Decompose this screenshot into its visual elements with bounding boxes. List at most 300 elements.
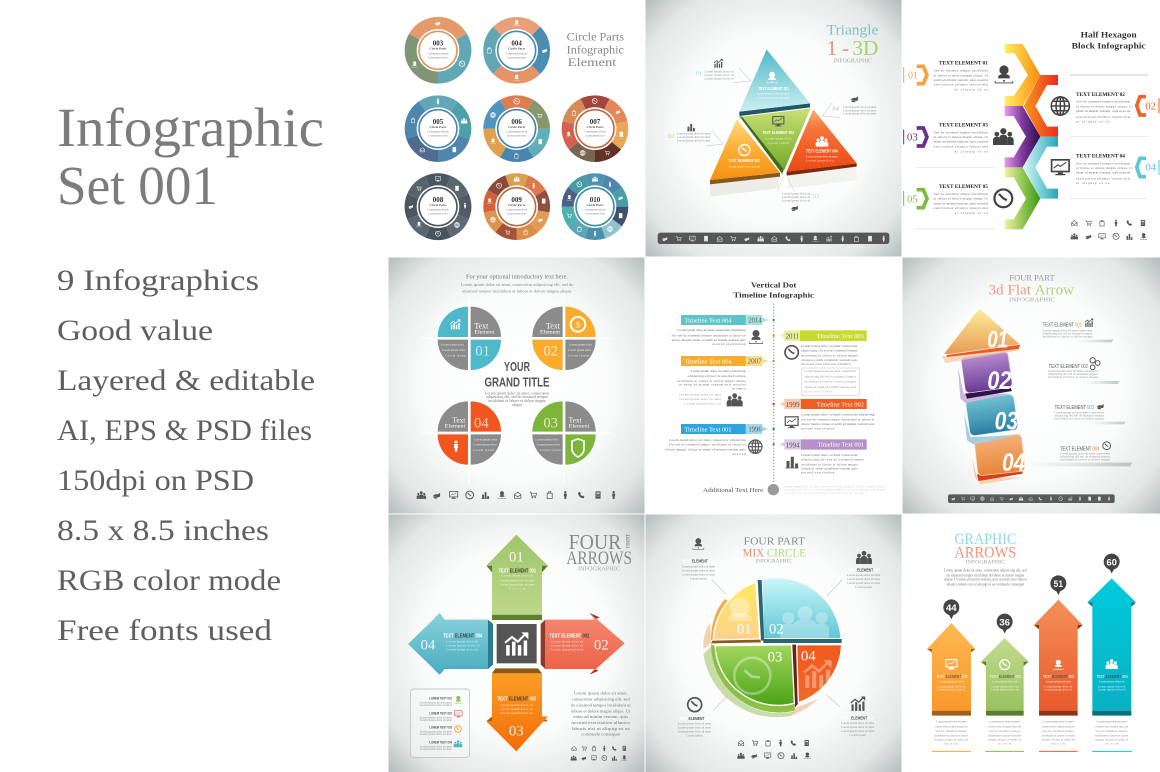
- heading: mix circle: [743, 537, 806, 565]
- block 03: 03: [907, 133, 918, 144]
- ring 010: Circle Parts: [586, 203, 604, 207]
- column captions: Lorem ipsum dolor sit amet: [1096, 720, 1127, 724]
- ring 009: Lorem ipsum dolor: [507, 212, 528, 216]
- timeline entry 1999: nostrud exercitation: [801, 426, 835, 430]
- block 04: 04: [1145, 163, 1156, 174]
- ring 003: [401, 13, 475, 88]
- triangle: red right: Lorem ipsum dolor sit amet: [806, 154, 838, 158]
- label 003: adipisicing elit sed do eiusmod tempor: [1054, 413, 1105, 417]
- arrow up: green: Lorem: [509, 586, 526, 590]
- heading: timeline: Vertical Dot: [751, 281, 797, 290]
- timeline entry 1994: adipisicing elit sed do eiusmod tempor: [801, 458, 865, 462]
- callout 003: Lorem ipsum dolor sit amet: [678, 726, 711, 730]
- heading: 3d flat arrow: 3d Flat Arrow: [989, 282, 1074, 298]
- column captions: sed do eiusmod tempor: [935, 729, 968, 733]
- circle 02: [532, 307, 596, 370]
- label 002: TEXT ELEMENT 002: [1049, 364, 1088, 370]
- circle 03: Lorem ipsum dolor: [537, 443, 561, 447]
- arrow right: red: Lorem ipsum dolor sit: [551, 644, 583, 648]
- icon toolbar: [658, 233, 889, 244]
- ring 008: Lorem ipsum dolor: [428, 212, 449, 216]
- heading: 3d flat arrow: [989, 273, 1074, 303]
- column captions: Lorem ipsum dolor sit amet: [936, 720, 967, 724]
- label 003: [1054, 404, 1105, 420]
- tile gutters: [388, 0, 1160, 772]
- panel: four part mix circle: [645, 514, 902, 772]
- arrow left: teal: Lorem ipsum dolor sit: [446, 644, 480, 648]
- timeline entry 1994: aliqua ut enim ad minim veniam quis: [801, 467, 858, 471]
- pie shadows: [703, 599, 818, 717]
- ring 007: Lorem ipsum dolor: [585, 134, 606, 138]
- ring 008: [402, 171, 474, 242]
- timeline entry 1999: elit sed do eiusmod tempor incididunt ut labore et: [801, 417, 874, 421]
- ring 009: Lorem ipsum dolor sit: [506, 208, 527, 212]
- timeline entry 1994: Timeline Text 001: [817, 443, 864, 449]
- arrow segment 04: [972, 434, 1026, 484]
- circle 01: Lorem ipsum dolor: [441, 343, 465, 347]
- heading: four arrows: INFOGRAPHIC: [578, 567, 620, 573]
- arrow: 36 green: Lorem ipsum dolor sit: [991, 684, 1019, 688]
- arrow: 51 red: Lorem ipsum dolor sit: [1044, 688, 1072, 692]
- column captions: minim: [1052, 742, 1065, 746]
- triangle reflections: [710, 168, 857, 197]
- callout 004: Lorem ipsum: [849, 733, 866, 737]
- timeline entry 1996: nostrud: [732, 452, 746, 456]
- grand title: YOUR: [504, 360, 530, 374]
- heading: 3d flat arrow: INFOGRAPHIC: [1009, 297, 1055, 303]
- column captions: consectetur adipisicing elit: [1095, 724, 1128, 728]
- annotation 01: Lorem ipsum dolor sit: [704, 73, 734, 77]
- grand title body: adipisicing elit, sed do eiusmod tempor: [486, 394, 549, 400]
- triangle: green inverted: TEXT ELEMENT 003: [762, 130, 794, 136]
- ring 003: Lorem ipsum dolor sit: [427, 51, 449, 55]
- legend box: Lorem ipsum dolor sit amet: [420, 703, 452, 707]
- right paragraph: labore et dolore magna aliqua. Ut: [571, 708, 631, 713]
- column captions: Lorem ipsum dolor sit amet: [1043, 720, 1074, 724]
- arrow up: green: Lorem ipsum dolor sit: [501, 574, 533, 578]
- annotation 01: 01: [696, 70, 702, 77]
- heading: half hexagon: [1072, 31, 1146, 50]
- block 01: Sed do eiusmod tempor incididunt: [934, 69, 988, 73]
- callout 002: Lorem ipsum dolor sit amet: [847, 581, 880, 585]
- center chart square: [495, 622, 538, 665]
- feature list: 8.5 x 8.5 inches: [57, 514, 269, 547]
- icon grid: [1071, 220, 1147, 240]
- circle 04: 04: [474, 416, 489, 432]
- intro body: Lorem ipsum dolor sit amet, consectetur adipisicing elit, sed: [944, 567, 1027, 573]
- annotation 04: [822, 96, 876, 118]
- arrow right: red: 02: [594, 638, 609, 654]
- arrow: 36 green: [981, 614, 1029, 716]
- additional text footer: nostrud exercitation ullamco laboris nisi ut aliquip: [784, 492, 865, 495]
- ring 009: Circle Parts: [508, 203, 526, 207]
- callout 003: Lorem ipsum: [686, 734, 703, 738]
- circle 01: 01: [475, 344, 490, 360]
- triangle: green inverted: Lorem ipsum: [768, 141, 790, 145]
- annotation 04: Lorem ipsum dolor sit amet: [843, 105, 876, 109]
- panel: title and feature list: [57, 97, 324, 647]
- arrow: 60 cyan: Lorem ipsum dolor sit: [1098, 684, 1126, 688]
- label 002: adipisicing elit sed do eiusmod tempor: [1048, 372, 1099, 376]
- feature list: AI, EPS & PSD files: [57, 414, 312, 447]
- annotation 02: Lorem ipsum dolor sit amet: [677, 138, 710, 142]
- grand title body: incididunt ut labore et dolore magna: [488, 398, 546, 403]
- column captions: incididunt ut labore et dolore: [1042, 734, 1076, 738]
- circle 01: [438, 307, 501, 370]
- ring 007: 007: [590, 118, 601, 126]
- arrow segment 04: 04: [1002, 450, 1026, 477]
- ring 005: Lorem ipsum dolor: [428, 134, 449, 138]
- block 05: TEXT ELEMENT 05: [939, 184, 988, 190]
- timeline entry 2014: elit sed do eiusmod tempor incididunt ut labore et: [672, 333, 746, 337]
- right paragraph: laboris nisi ut aliquip ex ea: [572, 726, 630, 731]
- block 04: Sed do eiusmod tempor incididunt: [1076, 161, 1130, 165]
- panel: your grand title infographic: [388, 257, 645, 514]
- arrow right: red: Lorem ipsum dolor sit: [551, 648, 583, 652]
- circle 03: Lorem ipsum: [540, 448, 561, 452]
- callout 001: Lorem ipsum dolor sit amet: [682, 568, 715, 572]
- grand title: [484, 360, 549, 390]
- arrow left: teal: Lorem ipsum dolor sit: [446, 648, 478, 652]
- icon row: [417, 491, 615, 499]
- block 05: 05: [907, 194, 918, 205]
- timeline entry 1996: [666, 424, 775, 456]
- callout 003: TEXT ELEMENT 003: [679, 716, 711, 721]
- ring 006: 006: [511, 118, 522, 126]
- ring 008: Circle Parts: [429, 203, 447, 207]
- timeline entry 1994: incididunt ut labore et dolore magna: [801, 462, 858, 466]
- callout 001: Lorem ipsum dolor sit amet: [682, 564, 715, 568]
- ring 004: Circle Parts: [508, 47, 526, 51]
- column captions: minim: [945, 742, 958, 746]
- column captions: magna aliqua ut enim ad: [935, 738, 968, 742]
- right paragraph: consectetur adipisicing elit, sed: [572, 696, 631, 702]
- circle 02: 02: [543, 344, 558, 360]
- right paragraph: nostrud exercitation ullamco: [571, 720, 630, 725]
- arrow up: green: TEXT ELEMENT 001: [499, 568, 536, 574]
- heading: graphic arrows: INFOGRAPHIC: [966, 559, 1005, 565]
- right paragraph: Lorem ipsum dolor sit amet,: [574, 690, 628, 696]
- pie slice 02 blue: 02: [769, 621, 784, 637]
- chevron: red: [1024, 75, 1058, 137]
- column captions: sed do eiusmod tempor: [989, 729, 1022, 733]
- triangle: green inverted: Lorem ipsum dolor: [765, 136, 793, 140]
- intro text: eiusmod tempor incididunt ut labore et dolore magna aliqua.: [462, 289, 572, 294]
- arrow: 44 orange: TEXT ELEMENT 001: [936, 674, 968, 680]
- block 01: ut labore et dolore magna aliqua. Ut: [934, 73, 988, 77]
- column captions: [935, 720, 1129, 746]
- heading: four arrows: ARROWS: [566, 548, 632, 569]
- timeline entry 2014: dolore magna aliqua ut enim ad minim veniam quis: [672, 338, 746, 342]
- annotation 02: [668, 124, 723, 146]
- triangle: orange left: Lorem ipsum dolor sit amet: [728, 164, 760, 168]
- arrow: 60 cyan: Lorem ipsum dolor sit: [1099, 680, 1124, 684]
- label 002: [1048, 358, 1100, 379]
- title: Set 001: [57, 155, 218, 216]
- ring 007: Lorem ipsum dolor sit: [584, 130, 606, 134]
- callout 002: Lorem ipsum dolor sit amet: [847, 573, 880, 577]
- block 05: Sed do eiusmod tempor incididunt: [934, 192, 988, 196]
- callout 004: Lorem ipsum dolor sit amet: [841, 729, 874, 733]
- callout 001: Lorem ipsum dolor sit amet: [682, 572, 715, 576]
- intro body: ullamco laboris nisi ut aliquip ex ea commodo consequat: [947, 581, 1025, 586]
- pie slice 03 green: [715, 645, 794, 705]
- column captions: incididunt ut labore et dolore: [935, 734, 969, 738]
- ring 006: Lorem ipsum dolor sit: [506, 130, 527, 134]
- note box: [802, 368, 859, 395]
- legend box: Lorem ipsum dolor sit amet: [420, 747, 452, 751]
- callout 004: [826, 695, 874, 737]
- timeline entry 1999: Lorem ipsum dolor sit amet consectetur adipisicing: [801, 413, 875, 417]
- arrow: 44 orange: Lorem ipsum dolor sit: [937, 684, 965, 688]
- grand title body: aliqua: [512, 402, 522, 407]
- ring 007: [557, 90, 633, 167]
- timeline entry 2014: nostrud exercitation: [712, 342, 746, 346]
- block 04: TEXT ELEMENT 04: [1076, 154, 1125, 160]
- callout 004: TEXT ELEMENT 004: [842, 715, 874, 720]
- arrow left: teal: Lorem ipsum dolor sit: [446, 640, 478, 644]
- heading: triangle 1-3D: [827, 22, 878, 64]
- arrow right: red: [541, 613, 625, 675]
- timeline entry 2007: ullamco: [732, 386, 746, 390]
- icon grid: [571, 746, 627, 761]
- ring 004: Lorem ipsum dolor: [507, 55, 528, 59]
- legend box: Lorem ipsum dolor sit amet: [420, 729, 452, 733]
- block 02: TEXT ELEMENT 02: [1076, 92, 1125, 98]
- circle 03: Lorem ipsum dolor: [535, 437, 560, 441]
- arrow segment 02: 02: [987, 368, 1012, 395]
- heading: triangle 1-3D: 3D: [852, 38, 878, 60]
- timeline entry 1996: Lorem ipsum dolor sit amet consectetur adipisicing: [669, 438, 746, 442]
- timeline entry 2011: nostrud exercitation ullamco: [801, 362, 851, 366]
- label 001: incididunt ut labore et dolore magna: [1043, 334, 1093, 338]
- circle 04: Text: [452, 415, 465, 424]
- callout 001: [682, 538, 726, 594]
- timeline entry 1999: Timeline Text 002: [817, 402, 864, 408]
- arrow: 60 cyan: Lorem ipsum dolor sit: [1098, 688, 1126, 692]
- title: [57, 97, 324, 216]
- heading: triangle 1-3D: INFOGRAPHIC: [833, 58, 872, 64]
- arrow right: red: Lorem ipsum dolor sit: [551, 640, 583, 644]
- heading: triangle 1-3D: 1 -: [827, 38, 849, 60]
- additional text footer: Additional Text Here: [703, 487, 763, 494]
- dotted axis: [772, 304, 776, 484]
- annotation 03: Lorem ipsum dolor sit: [782, 198, 810, 202]
- block 03: ut aliquip ex ea: [955, 149, 989, 153]
- block 04: enim ad minim veniam, quis nostrud: [1076, 171, 1131, 176]
- chevron: green: [1005, 167, 1040, 229]
- label 002: incididunt ut labore et dolore magna: [1048, 375, 1099, 379]
- arrow: 60 cyan: TEXT ELEMENT 004: [1096, 674, 1128, 680]
- timeline entry 2011: adipisicing elit sed do eiusmod tempor: [801, 349, 859, 353]
- triangle: red right: [787, 109, 857, 176]
- column captions: consectetur adipisicing elit: [988, 724, 1021, 728]
- ring 006: Lorem ipsum dolor: [507, 134, 528, 138]
- heading: graphic arrows: GRAPHIC: [954, 531, 1016, 548]
- timeline entry 1994: Lorem ipsum dolor sit amet consectetur: [801, 453, 859, 457]
- ring 003: Lorem ipsum dolor: [428, 55, 449, 59]
- timeline entry 1994: 1994: [786, 441, 800, 449]
- legend box: Lorem ipsum dolor sit amet: [420, 700, 452, 704]
- annotation 01: Lorem ipsum dolor sit: [704, 76, 734, 80]
- heading: 3d flat arrow: FOUR PART: [1009, 273, 1055, 282]
- block 03: TEXT ELEMENT 03: [939, 122, 988, 128]
- right paragraph: [571, 690, 631, 737]
- timeline entry 2011: [772, 330, 867, 366]
- arrow: 51 red: Lorem ipsum dolor sit: [1044, 684, 1072, 688]
- circle 02: Lorem ipsum: [568, 353, 589, 357]
- legend box: LOREM TEXT 003: [429, 725, 452, 729]
- timeline entry 2007: [677, 356, 775, 406]
- ring 008: Lorem ipsum dolor sit: [427, 208, 449, 212]
- arrow: 60 cyan: 60: [1106, 557, 1117, 567]
- timeline entry 1999: dolore magna aliqua ut enim ad minim veniam quis: [801, 422, 875, 426]
- circle 01: Text: [474, 321, 489, 330]
- ring 004: [478, 12, 555, 89]
- intro text: [461, 275, 573, 294]
- ring 006: Circle Parts: [508, 125, 526, 129]
- column captions: magna aliqua ut enim ad: [1095, 738, 1129, 742]
- arrow: 51 red: Lorem ipsum dolor sit: [1046, 680, 1071, 684]
- label 001: TEXT ELEMENT 001: [1043, 323, 1082, 329]
- circle 02: $: [576, 320, 580, 329]
- arrow down: orange: 03: [509, 724, 524, 740]
- timeline entry 1996: dolore magna aliqua ut enim ad minim veniam quis: [666, 447, 746, 451]
- block 03: exercitation ullamco laboris nisi: [934, 144, 988, 148]
- ring 007: Circle Parts: [586, 125, 604, 129]
- label 001: Lorem ipsum dolor sit amet consectetur: [1043, 328, 1094, 332]
- heading: timeline: [733, 281, 815, 300]
- block 01: [904, 61, 1013, 92]
- legend box: [410, 689, 470, 757]
- block 05: exercitation ullamco laboris nisi: [934, 206, 988, 210]
- label 004: TEXT ELEMENT 004: [1060, 446, 1099, 452]
- heading: mix circle: INFOGRAPHIC: [755, 559, 792, 565]
- annotation 01: Lorem ipsum dolor sit: [704, 70, 734, 74]
- note box: incididunt ut labore et dolore magna: [804, 380, 857, 384]
- feature list: RGB color mode: [57, 564, 281, 597]
- annotation 03: 03: [813, 193, 820, 200]
- arrow segment 03: 03: [995, 409, 1018, 436]
- ring 005: Lorem ipsum dolor sit: [427, 130, 449, 134]
- annotation 02: Lorem ipsum dolor sit amet: [677, 132, 710, 136]
- label 003: TEXT ELEMENT 003: [1055, 405, 1094, 411]
- legend box: LOREM TEXT 002: [429, 711, 452, 715]
- grand title body: Lorem ipsum dolor sit amet, consectetur: [485, 390, 550, 396]
- arrow: 44 orange: Lorem ipsum dolor sit: [939, 680, 964, 684]
- triangle: blue top: Lorem ipsum dolor sit amet: [757, 95, 789, 99]
- title: Infographic: [57, 97, 324, 158]
- arrow head 01: [942, 308, 1020, 363]
- arrow: 36 green: TEXT ELEMENT 002: [990, 674, 1021, 680]
- ring 009: [478, 168, 555, 245]
- timeline entry 2007: ut enim ad minim veniam quis nostrud: [679, 383, 746, 387]
- arrow down: orange: Lorem ipsum dolor sit: [501, 703, 533, 707]
- icon toolbar: [948, 494, 1115, 503]
- timeline entry 1994: nostrud exercitation: [801, 471, 835, 475]
- triangle: red right: TEXT ELEMENT 004: [806, 149, 838, 155]
- timeline entry 1996: 1996: [748, 426, 762, 434]
- label 004: incididunt ut labore et dolore magna: [1060, 458, 1111, 462]
- timeline entry 2011: aliqua ut enim ad minim veniam quis: [801, 358, 858, 362]
- intro body: aliqua. Ut enim ad minim veniam, quis nostrud exercitation: [944, 577, 1027, 583]
- heading: four arrows: [566, 530, 632, 573]
- pie slice 02 blue: [758, 578, 842, 643]
- ring 010: [557, 168, 633, 245]
- pie slice 04 red: [792, 645, 842, 707]
- annotation 04: Lorem ipsum dolor sit amet: [843, 108, 876, 112]
- callout 003: Lorem ipsum dolor sit amet: [678, 722, 711, 726]
- triangle: blue top: [739, 49, 810, 116]
- circle 03: 03: [543, 416, 558, 432]
- annotation 02: 02: [668, 133, 674, 140]
- heading: graphic arrows: [954, 531, 1016, 565]
- callout 004: Lorem ipsum dolor sit amet: [841, 721, 874, 725]
- arrow: 44 orange: 44: [946, 603, 957, 613]
- callout 004: Lorem ipsum dolor sit amet: [841, 725, 874, 729]
- additional text footer: [703, 484, 886, 495]
- right paragraph: enim ad minim veniam, quis: [573, 714, 628, 720]
- heading: four arrows: COUNT: [626, 534, 631, 548]
- arrow: 44 orange: [927, 599, 975, 716]
- circle 02: Lorem ipsum dolor: [568, 348, 592, 352]
- heading: timeline: Timeline Infographic: [733, 291, 815, 300]
- label 002: Lorem ipsum dolor sit amet consectetur: [1048, 369, 1099, 373]
- note box: Lorem ipsum dolor sit amet consectetur: [804, 369, 857, 373]
- label 001: [1043, 318, 1094, 338]
- chevron: yellow: [1005, 44, 1040, 106]
- note box: nostrud exerc: [804, 390, 833, 394]
- dividers: [915, 75, 1148, 229]
- circle 01: Lorem ipsum: [445, 353, 467, 357]
- ring 003: Circle Parts: [429, 47, 447, 51]
- timeline entry 1994: [772, 439, 867, 475]
- panel: half hexagon block infographic: [902, 0, 1160, 257]
- column captions: consectetur adipisicing elit: [1042, 724, 1075, 728]
- note box: aliqua ut enim ad minim veniam quis: [804, 385, 857, 389]
- block 01: ut aliquip ex ea: [955, 88, 989, 92]
- timeline entry 2007: Lorem ipsum dolor sit amet: [679, 392, 721, 396]
- timeline entry 2014: 2014: [748, 317, 762, 325]
- triangle: orange left: TEXT ELEMENT 002: [728, 158, 760, 164]
- ring 005: Circle Parts: [429, 125, 447, 129]
- label 003: incididunt ut labore et dolore magna: [1054, 416, 1105, 420]
- ring 006: [479, 91, 554, 166]
- timeline entry 1996: Timeline Text 001: [684, 427, 732, 433]
- block 02: Sed do eiusmod tempor incididunt: [1076, 100, 1130, 104]
- block 01: 01: [908, 71, 918, 82]
- pie slice 04 red: 04: [801, 649, 816, 665]
- block 03: ut labore et dolore magna aliqua. Ut: [934, 135, 988, 139]
- ring 010: 010: [590, 196, 601, 204]
- legend box: LOREM TEXT 004: [429, 740, 453, 744]
- callout 001: Lorem ipsum: [690, 576, 707, 580]
- panel: four arrows infographic: [388, 514, 645, 772]
- callout 002: TEXT ELEMENT 002: [848, 567, 880, 572]
- triangle: orange left: [710, 119, 780, 184]
- arrow up: green: Lorem ipsum dolor sit amet: [500, 583, 535, 587]
- annotation 04: 04: [832, 106, 840, 113]
- heading: triangle 1-3D: Triangle: [827, 22, 878, 38]
- chevron: purple: [1005, 106, 1040, 167]
- arrow head 01: 01: [987, 327, 1008, 354]
- heading: circle parts: [567, 32, 624, 69]
- block 03: enim ad minim veniam, quis nostrud: [934, 140, 988, 145]
- ring 005: [400, 90, 476, 167]
- column captions: consectetur adipisicing elit: [935, 724, 968, 728]
- circle 04: Lorem ipsum: [473, 448, 495, 452]
- heading: circle parts: Infographic: [567, 44, 624, 56]
